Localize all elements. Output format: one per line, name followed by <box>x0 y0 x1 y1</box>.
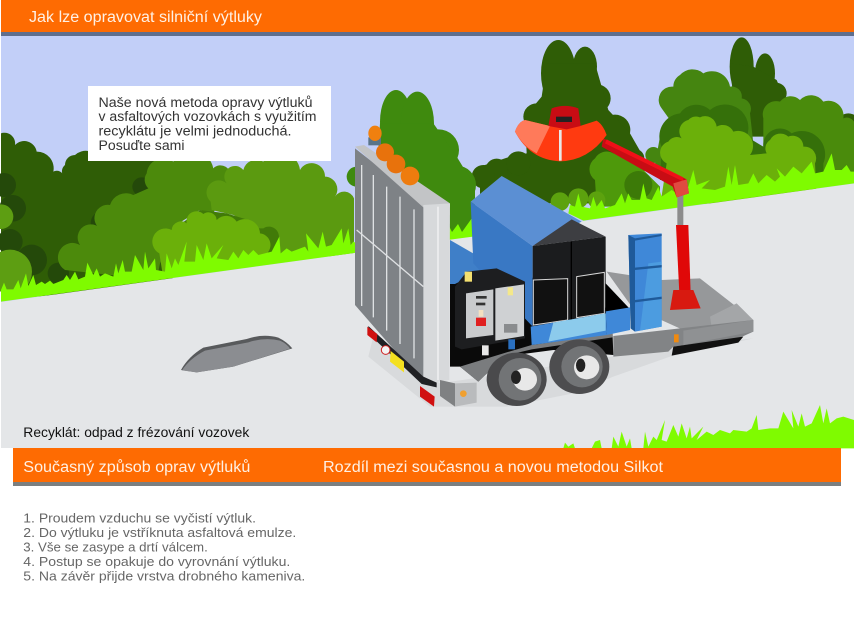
callout: intro text: v asfaltových vozovkách s využitím <box>98 109 316 124</box>
mower head <box>515 120 607 161</box>
section header bar <box>13 448 841 486</box>
truck with recycling machine <box>355 106 753 407</box>
red crane arm <box>515 106 701 310</box>
steps list: 4. Postup se opakuje do vyrovnání výtluku. <box>23 554 290 569</box>
title: Jak lze opravovat silniční výtluky <box>29 9 262 26</box>
heading: current method: Současný způsob oprav výtluků <box>23 459 250 476</box>
rear wheel <box>549 339 609 394</box>
dark gable front <box>533 219 606 246</box>
grass strip left <box>1 228 357 302</box>
right background bushes <box>472 37 854 211</box>
flat bed platform <box>607 272 753 357</box>
callout: intro text: Posuďte sami <box>98 138 184 153</box>
steps list: 1. Proudem vzduchu se vyčistí výtluk. <box>23 510 256 525</box>
big rear panel <box>355 126 477 407</box>
grass foreground bottom right <box>563 405 854 448</box>
blue storage rack <box>628 233 662 332</box>
left background bushes <box>0 133 354 300</box>
road <box>1 184 854 448</box>
blue hopper <box>471 176 630 345</box>
heading: difference: Rozdíl mezi současnou a novou metodou Silkot <box>323 459 664 476</box>
ground shadow <box>368 337 753 407</box>
steps list <box>23 510 305 584</box>
callout: intro text <box>88 86 331 161</box>
pothole <box>181 336 292 372</box>
rear blue block <box>450 240 493 284</box>
control cabinet <box>455 268 525 355</box>
steps list: 3. Vše se zasype a drtí válcem. <box>23 540 208 555</box>
step box <box>440 380 477 407</box>
callout: intro text: Naše nová metoda opravy výtluků <box>98 95 312 110</box>
grass strip behind truck <box>440 218 500 241</box>
steps list: 2. Do výtluku je vstříknuta asfaltová emulze. <box>23 525 296 540</box>
header bar top <box>1 0 854 36</box>
warning lights <box>368 126 419 185</box>
tree behind panel <box>347 90 476 233</box>
sky <box>1 36 854 336</box>
front wheel <box>487 353 547 406</box>
rear lights and plate <box>367 327 435 407</box>
grass strip right <box>568 153 854 221</box>
steps list: 5. Na závěr přijde vrstva drobného kameniva. <box>23 569 305 584</box>
note: recycled material: Recyklát: odpad z frézování vozovek <box>23 425 250 440</box>
callout: intro text: recyklátu je velmi jednoduchá. <box>98 124 292 138</box>
chassis <box>450 277 613 382</box>
